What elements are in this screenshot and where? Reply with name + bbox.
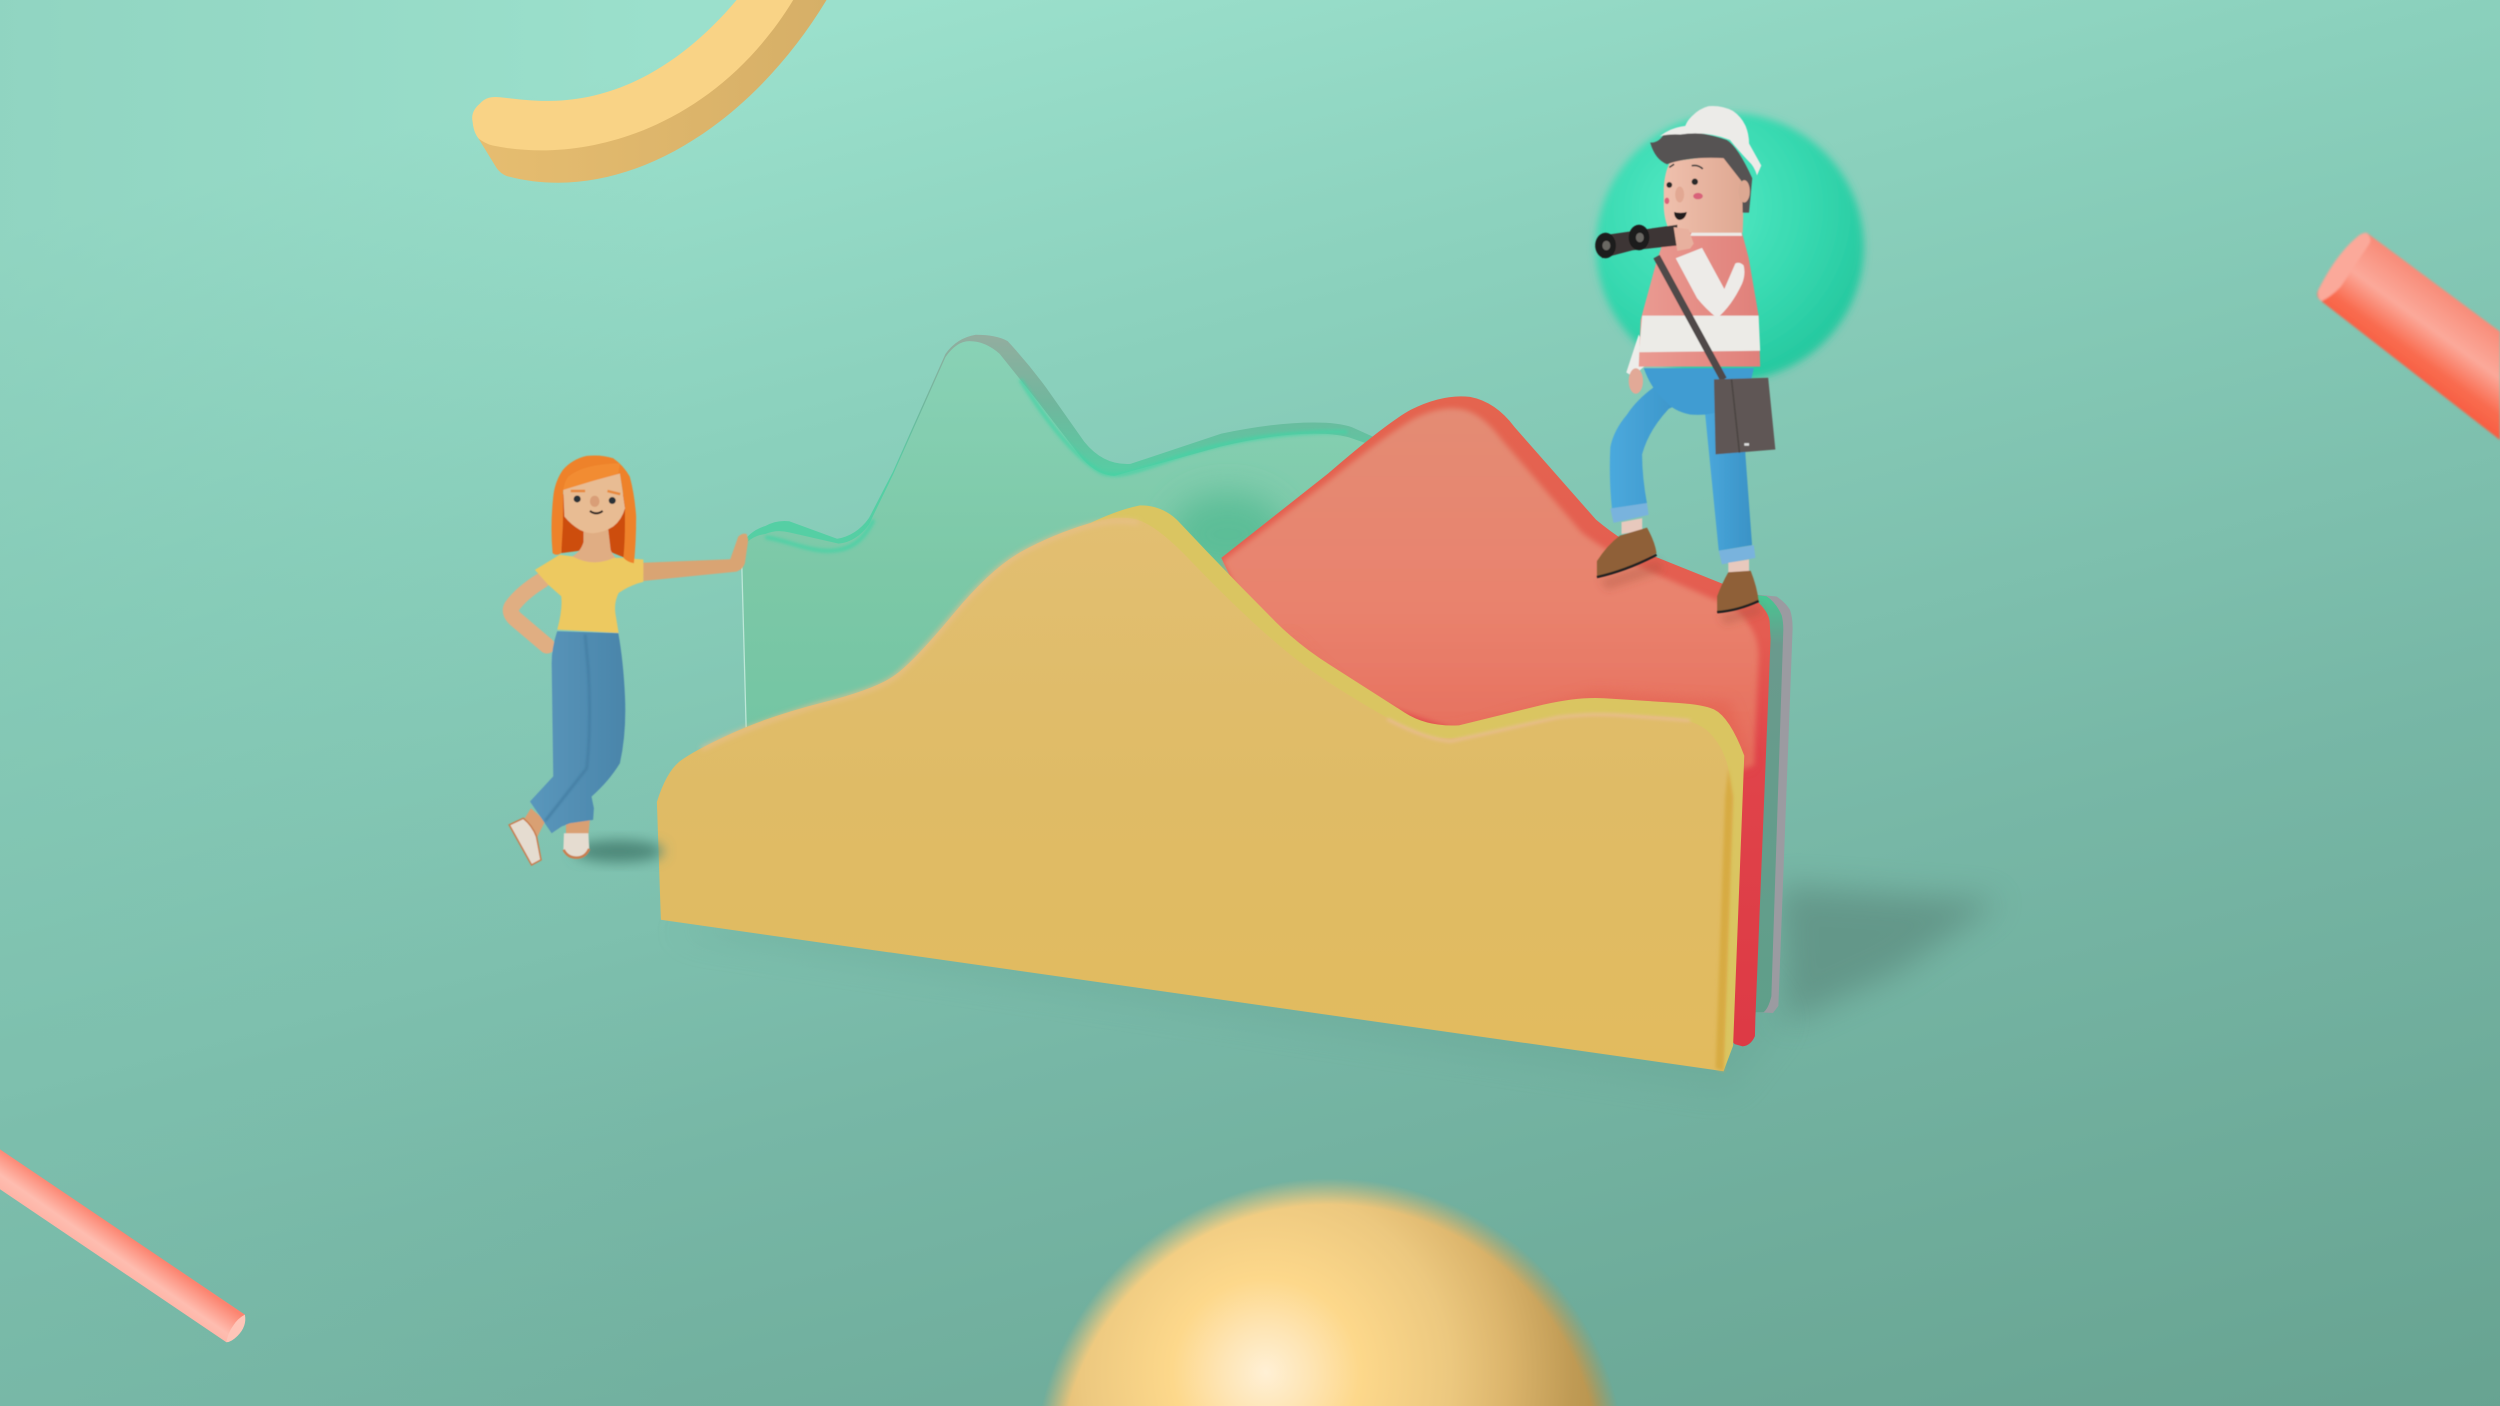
shirt xyxy=(535,555,643,633)
binoculars xyxy=(1597,225,1677,258)
hat xyxy=(1660,106,1761,175)
ear xyxy=(1739,180,1750,202)
blurred golden sphere xyxy=(1044,1180,1616,1406)
bent leg xyxy=(1610,385,1690,509)
yellow face xyxy=(657,518,1733,1071)
shoe shadows xyxy=(1599,560,1763,625)
green right edge xyxy=(1757,595,1793,1013)
yellow ridge highlights xyxy=(702,521,1138,749)
facial features xyxy=(574,495,581,502)
ground shadow xyxy=(574,840,663,862)
shirt stripe xyxy=(1639,316,1760,352)
woman character xyxy=(509,455,748,865)
back sleeve xyxy=(1626,334,1652,376)
strap xyxy=(1657,257,1724,379)
left arm xyxy=(511,580,547,646)
socks xyxy=(1621,518,1642,534)
crossed leg fold xyxy=(545,634,590,821)
yellow front layer xyxy=(657,505,1744,1071)
hand on binoculars xyxy=(1674,227,1694,251)
decorative yellow arc xyxy=(472,0,827,183)
ankles xyxy=(523,808,590,837)
green back layer xyxy=(741,335,1793,1013)
shoes xyxy=(1597,528,1657,577)
head xyxy=(1664,155,1743,233)
decorative coral tube xyxy=(2317,233,2500,440)
fringe xyxy=(563,463,620,490)
bag xyxy=(1714,378,1775,454)
hair front xyxy=(551,455,636,563)
yellow side edge xyxy=(1084,505,1744,1071)
shoes xyxy=(509,818,541,865)
chart floor shadow xyxy=(670,861,2001,1092)
man character xyxy=(1595,106,1775,625)
decorative pink stick xyxy=(0,1149,245,1342)
jeans xyxy=(530,631,625,833)
white sleeve xyxy=(1676,248,1744,318)
face details xyxy=(1666,182,1672,188)
straight leg xyxy=(1703,383,1752,551)
green ridge highlights xyxy=(765,379,1347,551)
hips xyxy=(1644,368,1754,415)
area chart xyxy=(657,335,1793,1071)
teal glowing circle xyxy=(1596,113,1864,381)
yellow right shade xyxy=(1716,768,1733,1071)
face xyxy=(563,473,625,533)
neck xyxy=(569,523,620,568)
green inner shadow xyxy=(1170,493,1285,575)
torso xyxy=(1639,231,1760,367)
green side edge xyxy=(741,335,1384,574)
hair xyxy=(1650,132,1752,213)
collar xyxy=(1690,230,1742,236)
right arm xyxy=(643,534,748,581)
hand at side xyxy=(1629,368,1643,394)
hair back xyxy=(561,494,625,558)
green face xyxy=(741,341,1384,729)
cuffs xyxy=(1610,503,1649,523)
red middle layer xyxy=(1221,396,1771,1046)
